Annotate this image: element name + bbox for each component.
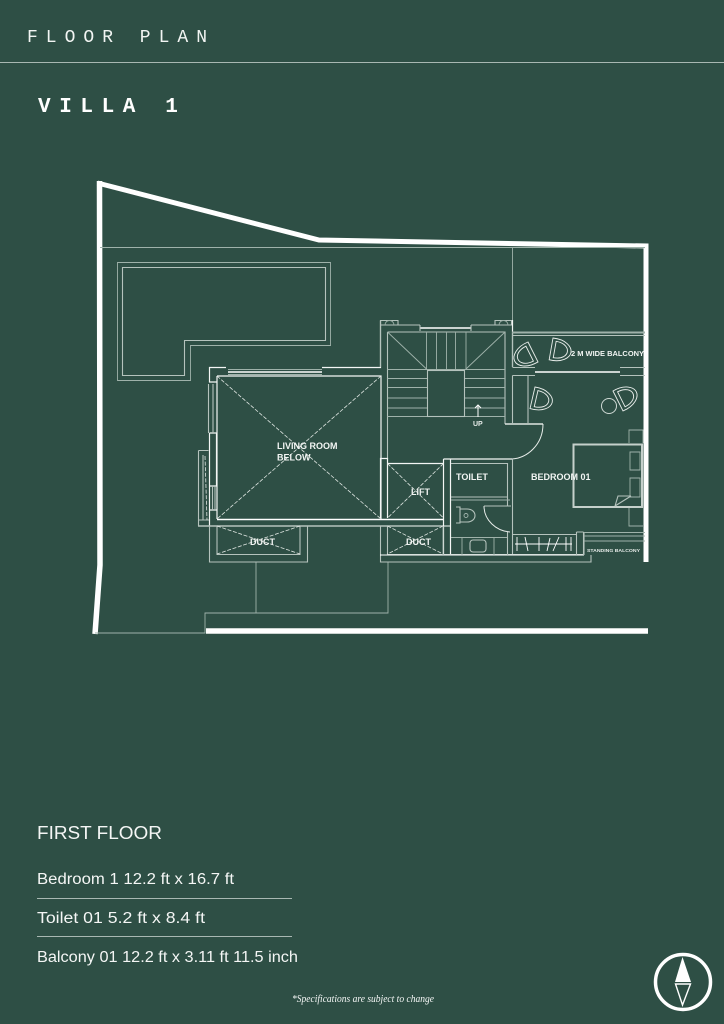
- floor details: [37, 823, 298, 966]
- toilet: [451, 464, 511, 555]
- balcony label: 2 M WIDE BALCONY: [571, 349, 644, 358]
- floor heading: FIRST FLOOR: [37, 823, 162, 843]
- toilet fixtures: [451, 507, 507, 555]
- villa heading: VILLA 1: [38, 96, 186, 119]
- bedroom chairs and table: [530, 382, 641, 414]
- balcony dimensions: Balcony 01 12.2 ft x 3.11 ft 11.5 inch: [37, 949, 298, 966]
- balcony: [510, 332, 645, 376]
- balcony chairs: [510, 338, 573, 371]
- plot boundary: [95, 181, 648, 634]
- living room walls: [198, 320, 450, 526]
- floor plan: [95, 181, 648, 634]
- living room label: LIVING ROOM: [277, 441, 338, 451]
- wardrobe: [512, 532, 584, 555]
- staircase: [380, 320, 512, 459]
- icon: compass: [656, 954, 710, 1010]
- standing balcony: [584, 532, 645, 554]
- toilet dimensions: Toilet 01 5.2 ft x 8.4 ft: [37, 910, 206, 927]
- bedroom walls and door: [505, 376, 543, 555]
- duct left: [210, 526, 308, 562]
- up arrow: UP: [473, 421, 483, 428]
- header rule: [0, 62, 724, 64]
- living room below: [198, 320, 450, 526]
- stair walls: [380, 320, 512, 459]
- bedroom label: BEDROOM 01: [531, 472, 591, 482]
- lift: [380, 458, 512, 555]
- living room diagonals: [217, 376, 381, 519]
- stair landing: [428, 370, 464, 416]
- bedroom dimensions: Bedroom 1 12.2 ft x 16.7 ft: [37, 871, 235, 888]
- stair treads: [388, 332, 505, 416]
- footnote: *Specifications are subject to change: [292, 994, 434, 1005]
- toilet: TOILET: [456, 472, 488, 482]
- duct right: [380, 526, 591, 562]
- living room label: BELOW: [277, 452, 311, 462]
- duct left: DUCT: [250, 537, 275, 547]
- pool outline: [118, 262, 330, 380]
- lift: LIFT: [411, 487, 430, 497]
- standing balcony: STANDING BALCONY: [587, 548, 641, 554]
- header title: FLOOR PLAN: [27, 28, 215, 48]
- bed: [574, 430, 643, 526]
- bedroom: [505, 376, 643, 555]
- duct right: DUCT: [406, 537, 431, 547]
